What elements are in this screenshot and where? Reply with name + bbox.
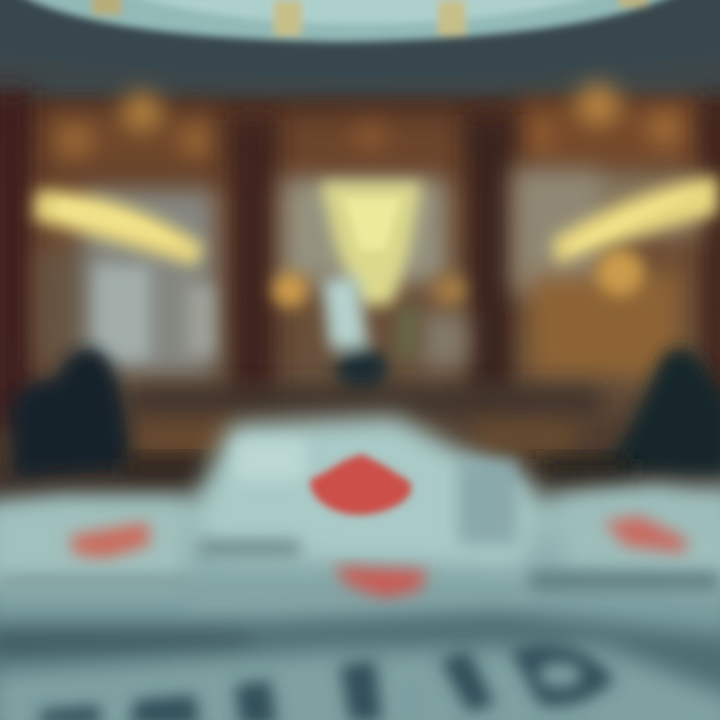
dark shadow behind desk: [125, 458, 630, 480]
ceiling band: [0, 0, 720, 98]
background wall: [0, 80, 720, 500]
letter centres: [402, 662, 582, 720]
red mark: right: [604, 516, 688, 553]
red mark: centre: [310, 454, 411, 515]
window pale highlights: [94, 248, 644, 360]
warm upper wall glow: [30, 83, 700, 173]
central document: [200, 416, 535, 565]
central document side stack: [235, 440, 518, 545]
right dark figure: [605, 348, 720, 478]
bottom pale sheet: [0, 645, 720, 720]
desk surface: [0, 485, 720, 720]
red mark: left: [70, 522, 150, 558]
text-like dark smudges: [0, 540, 720, 610]
ceiling light ring: [15, 0, 680, 42]
windows: [40, 168, 700, 377]
large blurred letters: [40, 644, 615, 720]
right document: [560, 488, 720, 585]
lower wall band: [130, 388, 600, 454]
central figure: [322, 275, 418, 394]
left document: [0, 500, 185, 585]
bottom dark band: [0, 612, 720, 720]
red mark: lower centre: [334, 566, 428, 598]
lamp cores: [58, 190, 702, 250]
ceiling lamps: [34, 175, 718, 305]
columns: [0, 90, 720, 430]
left dark figure: [10, 348, 128, 478]
